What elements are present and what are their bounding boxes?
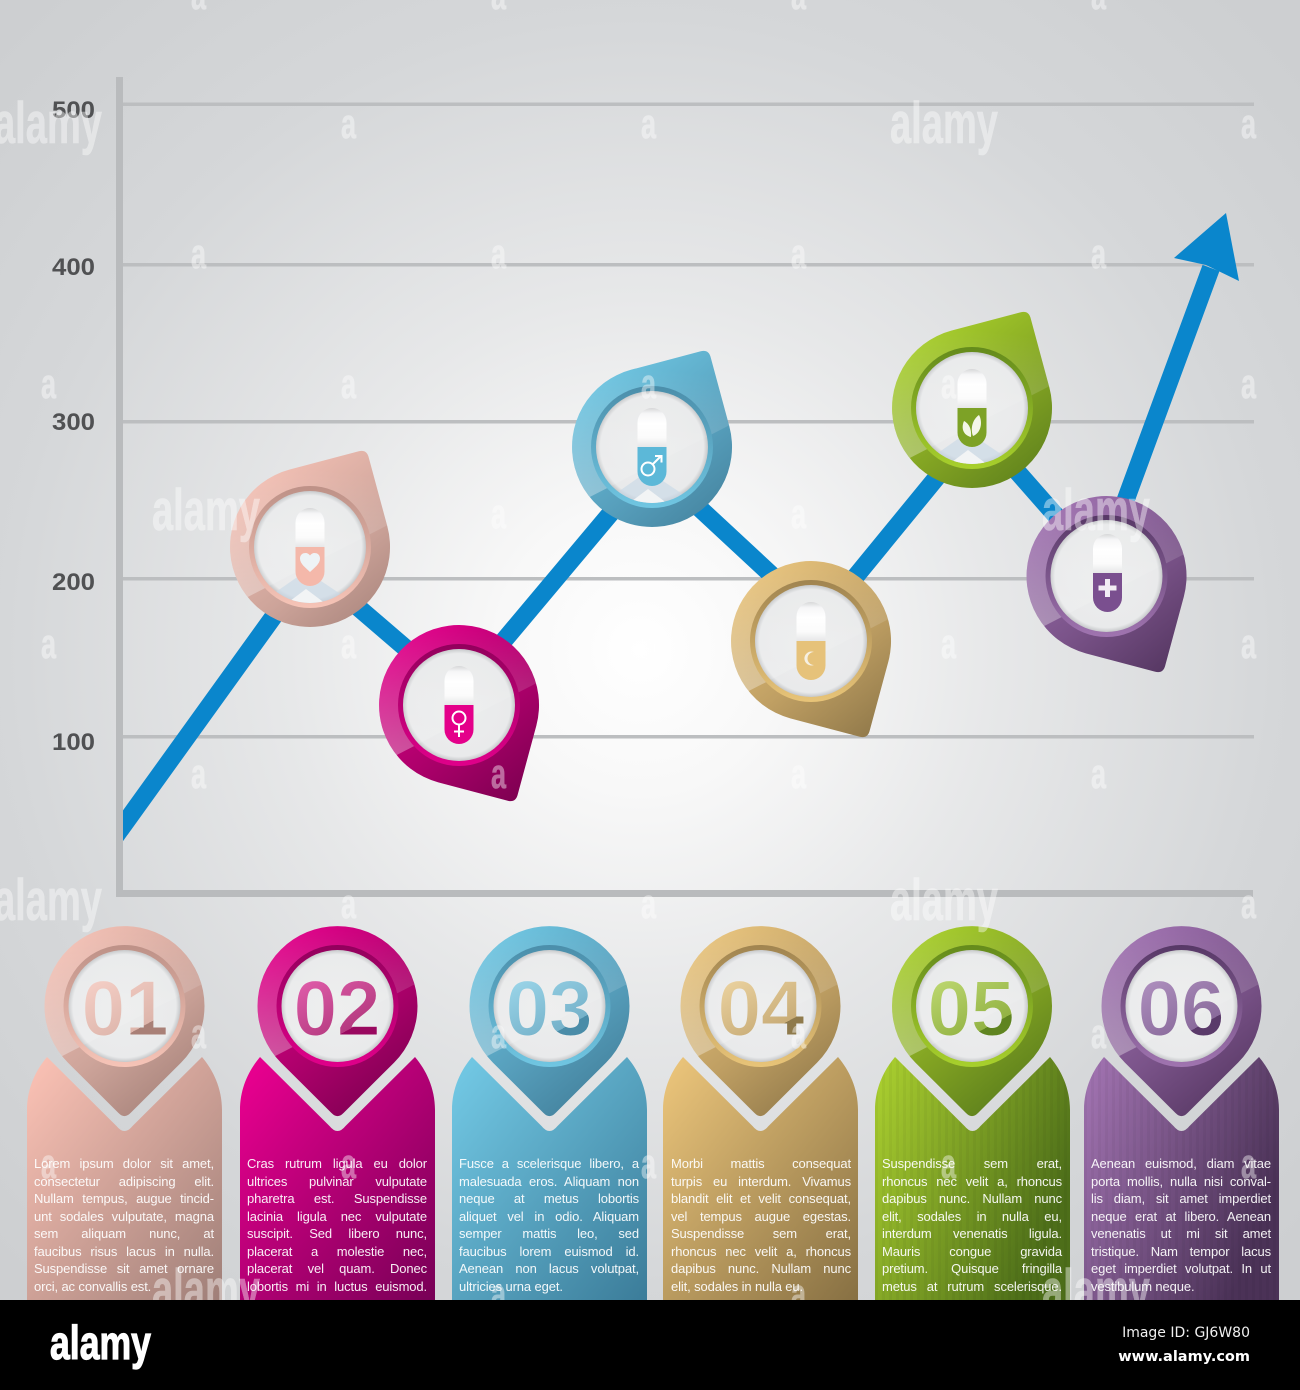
- watermarks: alamy: [890, 91, 998, 156]
- number 02: 02: [294, 964, 380, 1052]
- watermarks: a: [791, 1010, 806, 1057]
- watermarks: a: [341, 360, 356, 407]
- watermarks: a: [641, 620, 656, 667]
- y axis labels: 500: [52, 97, 95, 124]
- watermarks: a: [791, 750, 806, 797]
- footer logo: alamy: [50, 1316, 151, 1369]
- watermarks: a: [341, 620, 356, 667]
- text block 04: turpis eu interdum. Vivamus: [671, 1174, 851, 1189]
- badge 04: [680, 926, 840, 1116]
- text block 02: [247, 1156, 427, 1294]
- panel 04: [663, 926, 858, 1300]
- text block 04: blandit elit et velit consequat,: [671, 1191, 851, 1206]
- text block 05: Suspendisse sem erat,: [882, 1156, 1062, 1171]
- text block 01: consectetur adipiscing elit.: [34, 1174, 214, 1189]
- text block 01: faucibus risus lacus in nulla.: [34, 1244, 214, 1259]
- badge 01: [44, 926, 204, 1116]
- panel 05: [875, 926, 1070, 1300]
- watermarks: a: [1091, 1010, 1106, 1057]
- y axis labels: 400: [52, 254, 95, 281]
- text block 04: vel tempus augue egestas.: [671, 1209, 851, 1224]
- watermarks: a: [191, 1010, 206, 1057]
- badge 06: [1102, 926, 1262, 1116]
- watermarks: a: [1241, 100, 1256, 147]
- y axis labels: [52, 97, 95, 756]
- watermarks: a: [1241, 360, 1256, 407]
- text block 05: elit, sodales in nulla eu,: [882, 1209, 1062, 1224]
- watermarks: a: [491, 490, 506, 537]
- text block 06: lis diam, sit amet imperdiet: [1091, 1191, 1271, 1206]
- watermarks: alamy: [1042, 1258, 1150, 1323]
- watermarks: a: [41, 1140, 56, 1187]
- text block 01: Suspendisse sit amet ornare: [34, 1261, 214, 1276]
- watermarks: a: [491, 1010, 506, 1057]
- text block 06: vestibulum neque.: [1091, 1279, 1194, 1294]
- trend line with arrow: [112, 213, 1239, 841]
- y axis labels: 300: [52, 409, 95, 436]
- watermarks: a: [491, 1270, 506, 1317]
- badge 02: [258, 926, 418, 1116]
- watermarks: a: [491, 750, 506, 797]
- text block 01: [34, 1156, 214, 1294]
- text block 03: [459, 1156, 640, 1294]
- watermarks: alamy: [152, 478, 260, 543]
- text block 05: metus at rutrum scelerisque.: [882, 1279, 1062, 1294]
- number 01: 01: [82, 964, 168, 1052]
- watermarks: a: [1241, 880, 1256, 927]
- text block 01: orci, ac convallis est.: [34, 1279, 151, 1294]
- text block 04: elit, sodales in nulla eu.: [671, 1279, 803, 1294]
- badge 03: [470, 926, 630, 1116]
- pin: gold crescent capsule: [731, 561, 891, 738]
- pin: green leaf capsule: [892, 312, 1052, 488]
- pin: blue male capsule: [572, 350, 732, 527]
- text block 05: [882, 1156, 1062, 1294]
- panel 03: [452, 926, 647, 1300]
- image id: Image ID: GJ6W80: [1122, 1325, 1250, 1341]
- badge 05: [892, 926, 1052, 1116]
- chart: [52, 77, 1254, 897]
- text block 02: pharetra est. Suspendisse: [247, 1191, 427, 1206]
- text block 01: Nullam tempus, augue tincid-: [34, 1191, 214, 1206]
- watermarks: a: [941, 620, 956, 667]
- footer bar: [0, 1300, 1300, 1390]
- watermarks: a: [641, 100, 656, 147]
- text block 02: Cras rutrum ligula eu dolor: [247, 1156, 427, 1171]
- watermarks: a: [1091, 230, 1106, 277]
- watermarks: a: [641, 360, 656, 407]
- watermarks: a: [791, 230, 806, 277]
- text block 04: Morbi mattis consequat: [671, 1156, 851, 1171]
- text block 04: Suspendisse sem erat,: [671, 1226, 851, 1241]
- icon: crescent: [804, 652, 814, 666]
- text block 04: [671, 1156, 851, 1294]
- watermarks: a: [41, 360, 56, 407]
- text block 02: suscipit. Sed libero nunc,: [247, 1226, 427, 1241]
- icon: heart: [300, 553, 320, 572]
- text block 06: Aenean euismod, diam vitae: [1091, 1156, 1271, 1171]
- text block 06: venenatis ut mi sit amet: [1091, 1226, 1271, 1241]
- watermarks: a: [791, 490, 806, 537]
- watermarks: a: [341, 1140, 356, 1187]
- watermarks: alamy: [152, 1258, 260, 1323]
- watermarks: alamy: [890, 868, 998, 933]
- text block 03: faucibus lorem euismod id.: [459, 1244, 639, 1259]
- watermarks: a: [791, 1270, 806, 1317]
- icon: female symbol: [452, 712, 466, 737]
- watermarks: a: [341, 880, 356, 927]
- watermarks: a: [641, 880, 656, 927]
- icon: male symbol: [642, 456, 662, 476]
- pin: magenta female capsule: [379, 625, 540, 802]
- text block 03: semper mattis leo, sed: [459, 1226, 639, 1241]
- text block 03: ultricies urna eget.: [459, 1279, 563, 1294]
- watermarks: alamy: [1042, 478, 1150, 543]
- text block 03: Aenean non lacus volutpat,: [459, 1261, 639, 1276]
- chart axes: [116, 77, 1253, 897]
- text block 06: eget imperdiet volutpat. In ut: [1091, 1261, 1271, 1276]
- watermarks: a: [941, 1140, 956, 1187]
- text block 05: Mauris congue gravida: [882, 1244, 1062, 1259]
- icon: leaves: [963, 415, 981, 437]
- text block 02: ultrices pulvinar vulputate: [247, 1174, 427, 1189]
- text block 02: lobortis mi in luctus euismod.: [247, 1279, 427, 1294]
- text block 02: lacinia ligula nec vulputate: [247, 1209, 427, 1224]
- watermarks: a: [491, 230, 506, 277]
- text block 06: [1091, 1156, 1272, 1294]
- text block 06: porta mollis, nulla nisi conval-: [1091, 1174, 1271, 1189]
- watermarks: a: [341, 100, 356, 147]
- number 05: 05: [928, 964, 1014, 1052]
- pin: purple plus capsule: [1026, 496, 1186, 672]
- text block 03: Fusce a scelerisque libero, a: [459, 1156, 639, 1171]
- text block 05: interdum venenatis ligula.: [882, 1226, 1062, 1241]
- text block 04: dapibus nunc. Nullam nunc: [671, 1261, 851, 1276]
- text block 03: neque at metus lobortis: [459, 1191, 639, 1206]
- watermarks: a: [941, 360, 956, 407]
- watermarks: a: [1091, 750, 1106, 797]
- number 06: 06: [1138, 964, 1224, 1052]
- text block 01: unt sodales vulputate, magna: [34, 1209, 214, 1224]
- watermarks: a: [1241, 1140, 1256, 1187]
- text block 02: placerat vel quam. Donec: [247, 1261, 427, 1276]
- watermarks: a: [1241, 620, 1256, 667]
- text block 06: tristique. Nam tempor lacus: [1091, 1244, 1271, 1259]
- number 03: 03: [506, 964, 592, 1052]
- text block 06: neque erat at libero. Aenean: [1091, 1209, 1271, 1224]
- watermarks: a: [191, 750, 206, 797]
- text block 05: dapibus nunc. Nullam nunc: [882, 1191, 1062, 1206]
- watermarks: a: [641, 1140, 656, 1187]
- panel 01: [27, 926, 222, 1300]
- panel 06: [1084, 926, 1279, 1300]
- number 04: 04: [718, 964, 804, 1052]
- y axis labels: 200: [52, 569, 95, 596]
- panel 02: [240, 926, 435, 1300]
- pin: pink heart capsule: [230, 450, 390, 627]
- text block 03: malesuada eros. Aliquam non: [459, 1174, 639, 1189]
- text block 01: Lorem ipsum dolor sit amet,: [34, 1156, 214, 1171]
- watermarks: a: [41, 620, 56, 667]
- watermarks: a: [191, 230, 206, 277]
- y axis labels: 100: [52, 729, 95, 756]
- text block 05: rhoncus nec velit a, rhoncus: [882, 1174, 1062, 1189]
- text block 02: placerat a molestie nec,: [247, 1244, 427, 1259]
- text block 04: rhoncus nec velit a, rhoncus: [671, 1244, 851, 1259]
- text block 05: pretium. Quisque fringilla: [882, 1261, 1062, 1276]
- text block 01: sem aliquam nunc, at: [34, 1226, 214, 1241]
- text block 03: aliquet vel in odio. Aliquam: [459, 1209, 639, 1224]
- capsule with plus icon: [1093, 534, 1122, 612]
- website: www.alamy.com: [1118, 1349, 1250, 1365]
